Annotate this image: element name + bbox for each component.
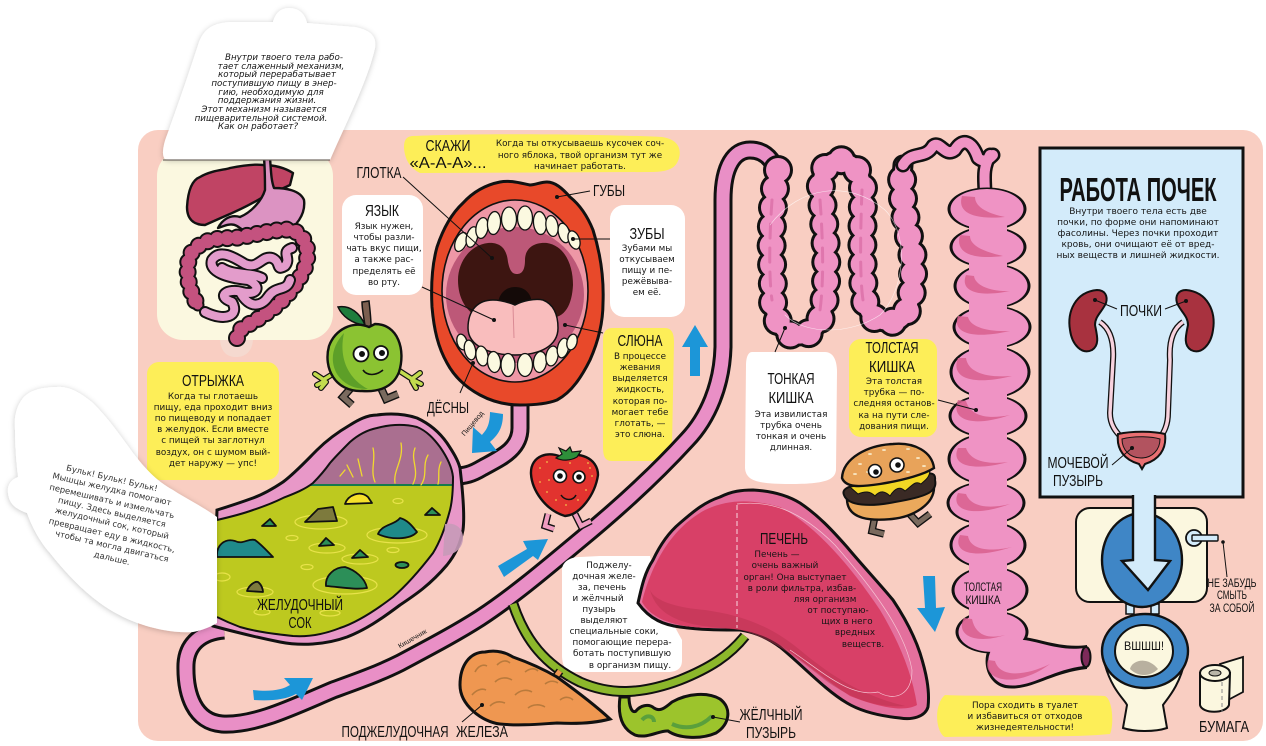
arrow: bottom right (253, 678, 313, 700)
lid (1102, 513, 1182, 607)
label: intestine: Кишечник (397, 628, 429, 650)
large intestine: ТОЛСТАЯ (964, 582, 1002, 594)
label: pancreas: ЖЕЛЕЗА (456, 724, 508, 741)
flap: stomach text (8, 387, 217, 632)
panel: tongue: пределять её (352, 267, 416, 277)
label: lips (555, 183, 625, 200)
arrow: to toilet (1122, 495, 1170, 590)
green bile duct (513, 604, 745, 692)
callout: go to toilet: жизнедеятельности! (976, 723, 1074, 733)
liver text: ляя организм (794, 595, 856, 605)
character: strawberry (531, 447, 598, 529)
panel: saliva: которая по- (613, 397, 667, 407)
mini liver (187, 165, 293, 225)
right kidney (1176, 290, 1214, 351)
label: gallbladder (740, 705, 802, 742)
panel: tongue: чать вкус пищи, (346, 244, 422, 254)
label: pancreas: ПОДЖЕЛУДОЧНАЯ (342, 724, 448, 741)
steam (340, 443, 441, 485)
panel: tongue: чтобы разли- (353, 233, 415, 243)
callout: say aaa: «А-А-А»... (410, 155, 486, 172)
liver text (744, 531, 884, 650)
flap text lines: дальше. (93, 549, 131, 567)
label: flush (1208, 540, 1256, 615)
panel: kidneys (1040, 148, 1243, 497)
panel: body overview (157, 150, 333, 357)
mini stomach (218, 158, 304, 235)
small intestine shading (770, 190, 863, 310)
rectum opening (1082, 647, 1090, 667)
panel: tongue: а также рас- (354, 255, 414, 265)
panel: small intestine (745, 326, 837, 484)
liver text: веществ. (842, 640, 884, 650)
kidneys intro text: Внутри твоего тела есть две (1069, 207, 1207, 217)
kidneys intro text: почки, по форме они напоминают (1057, 218, 1219, 228)
panel: small intestine: ТОНКАЯ (768, 371, 814, 388)
esophagus tube (455, 398, 520, 476)
callout: go to toilet: Пора сходить в туалет (972, 701, 1078, 711)
gallbladder (619, 694, 740, 737)
panel: pancreas and gallbladder note: ботать поступившую (573, 649, 671, 659)
panel: small intestine: длинная. (770, 443, 812, 453)
panel: large intestine: Эта толстая (866, 377, 922, 387)
panel: large intestine: КИШКА (869, 359, 915, 376)
panel: large intestine (849, 339, 978, 437)
kidneys intro text (1056, 207, 1220, 261)
icon: toilet paper (1199, 657, 1249, 736)
panel: burp: дет наружу — упс! (169, 459, 257, 469)
small intestine cut line (770, 191, 901, 330)
flap text lines: желудочный сок, который (54, 505, 170, 541)
panel: pancreas and gallbladder note: специальные соки, (570, 627, 658, 637)
flap text: тает слаженный механизм, (218, 62, 344, 72)
character: apple (315, 301, 421, 405)
flap text: пищеварительной системой. (195, 114, 327, 124)
panel: saliva (563, 323, 674, 461)
pancreas (460, 651, 610, 725)
panel: burp: Когда ты глотаешь (168, 392, 258, 402)
liver text: очень важный (752, 561, 818, 571)
label: throat (356, 165, 494, 260)
label: flush: СМЫТЬ (1217, 590, 1247, 602)
juice ripples (214, 498, 427, 616)
label: gums (427, 361, 475, 417)
panel: burp: в желудок. Если вместе (157, 425, 269, 435)
small intestine coils (770, 142, 993, 336)
panel: pancreas and gallbladder note: выделяют (580, 616, 628, 626)
panel: small intestine: тонкая и очень (756, 432, 826, 442)
toilet (1076, 508, 1218, 731)
panel: large intestine: ка на пути сле- (858, 411, 930, 421)
panel: teeth: ЗУБЫ (630, 226, 664, 243)
callout: say aaa: Когда ты откусываешь кусочек соч- (496, 139, 664, 149)
panel: pancreas and gallbladder note: пузырь (582, 605, 616, 615)
flap text: поддержания жизни. (218, 96, 316, 106)
liver text: вредных (835, 628, 875, 638)
panel: burp (147, 362, 279, 480)
arrow: down (917, 576, 945, 632)
panel: large intestine: ТОЛСТАЯ (866, 340, 918, 357)
liver (638, 490, 929, 719)
flap text lines: пищу. Здесь выделяется (57, 495, 167, 529)
arrow: up (682, 325, 708, 376)
panel: burp: воздух, он с шумом вый- (156, 448, 270, 458)
liver text: в роли фильтра, избав- (748, 584, 856, 594)
seat (1102, 614, 1188, 688)
panel: saliva: жидкость, (616, 385, 664, 395)
flap: introduction (163, 8, 375, 161)
lower teeth (455, 333, 579, 376)
flap text lines: Бульк! Бульк! Бульк! (65, 463, 159, 493)
kidneys intro text: ных веществ и лишней жидкости. (1056, 251, 1220, 261)
mini small intestine (205, 248, 292, 317)
panel: burp: с пищей ты заглотнул (161, 436, 265, 446)
flap text: поступившую пищу в энер- (211, 79, 337, 89)
panel: teeth: ем её. (633, 288, 661, 298)
callout: say aaa: СКАЖИ (426, 138, 470, 155)
bowl (1105, 660, 1185, 731)
label: bladder: ПУЗЫРЬ (1053, 473, 1103, 490)
label: esophagus: Пищевод (461, 410, 485, 438)
liver text: Печень — (754, 550, 800, 560)
icon: toilet paper: БУМАГА (1199, 719, 1249, 736)
panel: burp: пищу, еда проходит вниз (154, 403, 273, 413)
mouth (432, 181, 603, 405)
panel: pancreas and gallbladder note: Поджелу- (586, 561, 632, 571)
panel: pancreas and gallbladder note: за, печень (578, 583, 626, 593)
panel: pancreas and gallbladder note (562, 556, 682, 672)
upper teeth (452, 206, 582, 253)
kidneys intro text: кровь, они очищают её от вред- (1062, 240, 1214, 250)
label: pancreas (342, 703, 508, 741)
panel: pancreas and gallbladder note: в организм пищу. (589, 661, 671, 671)
panel: burp: по пищеводу и попадает (155, 414, 271, 424)
large intestine (946, 188, 1090, 689)
character: burger (842, 444, 935, 534)
label: bladder (1048, 446, 1134, 490)
panel: saliva: выделяется (612, 374, 668, 384)
throat (458, 243, 573, 318)
liver text: ПЕЧЕНЬ (760, 531, 808, 548)
arrow: to stomach (472, 412, 503, 453)
panel: teeth: откусываем (619, 255, 675, 265)
pink background panel (138, 130, 1263, 741)
intestine tube (186, 150, 778, 724)
panel: pancreas and gallbladder note: помогающие перера- (572, 638, 672, 648)
label: gums: ДЁСНЫ (427, 399, 469, 417)
panel: small intestine: КИШКА (768, 390, 814, 407)
arrow: up right (498, 539, 548, 577)
tank (1076, 508, 1207, 602)
large intestine shading (956, 196, 1050, 680)
panel: teeth: пищу и пе- (622, 266, 672, 276)
panel: saliva: глотать, — (615, 419, 666, 429)
panel: saliva: могает тебе (612, 408, 668, 418)
large intestine: КИШКА (966, 595, 1001, 607)
liver text: орган! Она выступает (744, 573, 846, 583)
label: kidneys (1093, 298, 1188, 320)
mini large intestine (188, 230, 307, 338)
stomach side tab (443, 524, 463, 556)
flap text: Как он работает? (218, 122, 298, 132)
label: kidneys: ПОЧКИ (1120, 303, 1162, 320)
panel: small intestine: трубка очень (760, 421, 822, 431)
kidneys intro text: фасолины. Через почки проходит (1058, 229, 1218, 239)
flap text: Внутри твоего тела рабо- (225, 53, 343, 63)
label: gallbladder: ЖЁЛЧНЫЙ (740, 705, 802, 724)
flap text: Этот механизм называется (200, 105, 327, 115)
flap text: гию, необходимую для (218, 88, 324, 98)
stomach: СОК (288, 615, 312, 632)
bladder (1118, 432, 1165, 469)
panel: pancreas and gallbladder note: дочная желе- (572, 572, 636, 582)
panel: saliva: В процессе (614, 352, 666, 362)
callout: say aaa (404, 134, 680, 173)
toilet: ВШШШ! (1124, 641, 1164, 653)
panel: teeth: Зубами мы (622, 244, 672, 254)
lips (432, 181, 603, 405)
panel: large intestine: дования пищи. (859, 422, 929, 432)
label: bladder: МОЧЕВОЙ (1048, 453, 1108, 472)
flap text lines (48, 463, 176, 567)
stomach (210, 414, 464, 645)
palate (446, 227, 584, 363)
small intestine top squiggle (903, 142, 993, 195)
flap text lines: превращает еду в жидкость, (48, 516, 176, 554)
tab under overview panel (220, 340, 253, 357)
panel: saliva: жевания (620, 363, 660, 373)
flap text: который перерабатывает (218, 70, 337, 80)
callout: say aaa: ного яблока, твой организм тут же (498, 151, 662, 161)
panel: saliva: СЛЮНА (618, 333, 663, 350)
panel: burp: ОТРЫЖКА (182, 373, 244, 390)
stomach: ЖЕЛУДОЧНЫЙ (257, 595, 343, 614)
liver text: от поступаю- (807, 606, 869, 616)
panel: small intestine: Эта извилистая (755, 410, 827, 420)
liver text: щих в него (821, 617, 873, 627)
stomach inner outline (217, 425, 453, 636)
back of throat (498, 287, 532, 305)
handle (1186, 530, 1202, 546)
label: gallbladder: ПУЗЫРЬ (746, 725, 796, 742)
label: lips: ГУБЫ (593, 183, 625, 200)
flap text lines: чтобы та могла двигаться (54, 528, 170, 564)
flap text (195, 53, 344, 132)
panel: saliva: это слюна. (615, 430, 665, 440)
rocks (217, 494, 440, 592)
left kidney (1069, 290, 1107, 351)
panel: teeth (571, 205, 685, 317)
label: throat: ГЛОТКА (356, 165, 402, 182)
panel: teeth: режёвыва- (622, 277, 672, 287)
gums (442, 200, 588, 382)
ureters (1100, 322, 1183, 438)
panel: tongue: Язык нужен, (355, 222, 413, 232)
flap text lines: перемешивать и измельчать (49, 482, 175, 520)
panel: large intestine: трубка — по- (864, 388, 924, 398)
panel: pancreas and gallbladder note: и жёлчный (572, 594, 624, 604)
callout: go to toilet (937, 695, 1112, 737)
panel: tongue (342, 195, 496, 322)
callout: go to toilet: и избавиться от отходов (968, 712, 1082, 722)
hinges (1126, 604, 1134, 614)
panel: large intestine: следняя останов- (853, 399, 935, 409)
stomach interior (217, 426, 452, 636)
panel: tongue: ЯЗЫК (365, 203, 400, 220)
callout: say aaa: начинает работать. (534, 162, 626, 172)
tongue (468, 299, 558, 355)
panel: tongue: во рту. (368, 278, 400, 288)
flap text lines: Мышцы желудка помогают (52, 470, 172, 508)
